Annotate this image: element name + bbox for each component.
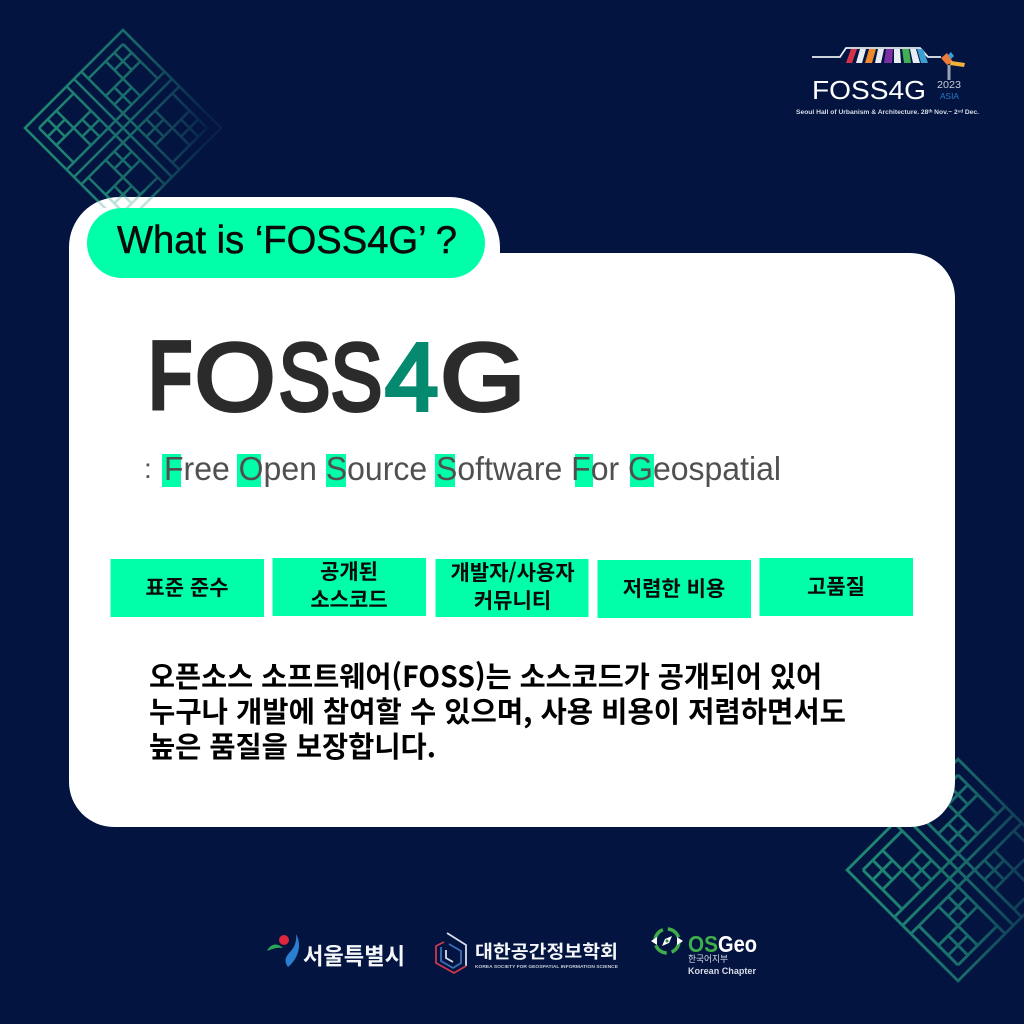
- feature: low cost: [598, 560, 751, 618]
- icon: KSGIS: [436, 933, 466, 973]
- logo: colored stripes: [846, 49, 928, 63]
- lattice showing faintly over the card edge: [86, 190, 160, 208]
- feature: community: 커뮤니티: [474, 585, 551, 615]
- large FOSS4G wordmark: F: [148, 319, 193, 432]
- OSGeo Korean Chapter logo: [651, 929, 757, 977]
- Korea Society for Geospatial Information Science logo: [436, 933, 618, 973]
- FOSS4G 2023 Asia logo: ASIA: [940, 91, 959, 101]
- logo: brush icon: [941, 52, 965, 80]
- OSGeo Korean Chapter logo: 한국어지부: [688, 952, 728, 965]
- heading pill: [87, 208, 485, 278]
- large FOSS4G wordmark: S: [278, 323, 330, 431]
- OSGeo Korean Chapter logo: Korean Chapter: [688, 966, 756, 977]
- Seoul City logo: [267, 934, 405, 971]
- logo: road line: [812, 48, 941, 57]
- description text: 누구나 개발에 참여할 수 있으며, 사용 비용이 저렴하면서도: [149, 689, 846, 731]
- OSGeo Korean Chapter logo: Geo: [718, 931, 757, 957]
- Seoul City logo: 서울특별시: [303, 937, 405, 971]
- subtitle with highlighted initials: Free Open Source Software For Geospatial: [164, 450, 781, 487]
- Korea Society for Geospatial Information Science logo: 대한공간정보학회: [475, 938, 618, 964]
- FOSS4G 2023 Asia logo: 2023: [937, 79, 961, 91]
- FOSS4G 2023 Asia logo: [796, 48, 979, 116]
- feature: community: 개발자/사용자: [450, 557, 575, 587]
- large FOSS4G wordmark: G: [440, 323, 525, 431]
- feature: open source code: 소스코드: [310, 584, 388, 614]
- OSGeo Korean Chapter logo: OS: [688, 931, 718, 957]
- description text: 오픈소스 소프트웨어(FOSS)는 소스코드가 공개되어 있어: [149, 654, 822, 696]
- feature: high quality: [760, 558, 913, 616]
- FOSS4G 2023 Asia logo: Seoul Hall of Urbanism & Architecture. 28ᵗʰ Nov.~ 2ⁿᵈ Dec.: [796, 109, 979, 116]
- feature boxes: [110, 556, 913, 618]
- large FOSS4G wordmark: 4: [385, 324, 438, 431]
- heading pill: What is ‘FOSS4G’ ?: [117, 219, 457, 262]
- panel: white card with tab: [69, 197, 955, 827]
- feature: open source code: [272, 556, 426, 616]
- large FOSS4G wordmark: O: [195, 324, 275, 431]
- subtitle with highlighted initials: :: [144, 453, 152, 484]
- feature: low cost: 저렴한 비용: [623, 573, 725, 603]
- FOSS4G 2023 Asia logo: FOSS4G: [812, 75, 926, 105]
- Korea Society for Geospatial Information Science logo: KOREA SOCIETY FOR GEOSPATIAL INFORMATION SCIENCE: [475, 964, 618, 969]
- feature: high quality: 고품질: [807, 571, 865, 601]
- decorative lattice: top left: [25, 30, 221, 226]
- large FOSS4G wordmark: S: [330, 323, 382, 431]
- large FOSS4G wordmark: [148, 319, 525, 432]
- description text: 높은 품질을 보장합니다.: [149, 724, 436, 766]
- description text: [149, 654, 846, 766]
- feature: community: [436, 557, 588, 617]
- icon: Seoul: [267, 934, 299, 967]
- feature: standards: 표준 준수: [145, 572, 229, 602]
- feature: open source code: 공개된: [320, 556, 378, 586]
- decorative lattice: bottom right: [847, 759, 1024, 981]
- feature: standards: [110, 559, 264, 617]
- icon: compass: [651, 929, 683, 953]
